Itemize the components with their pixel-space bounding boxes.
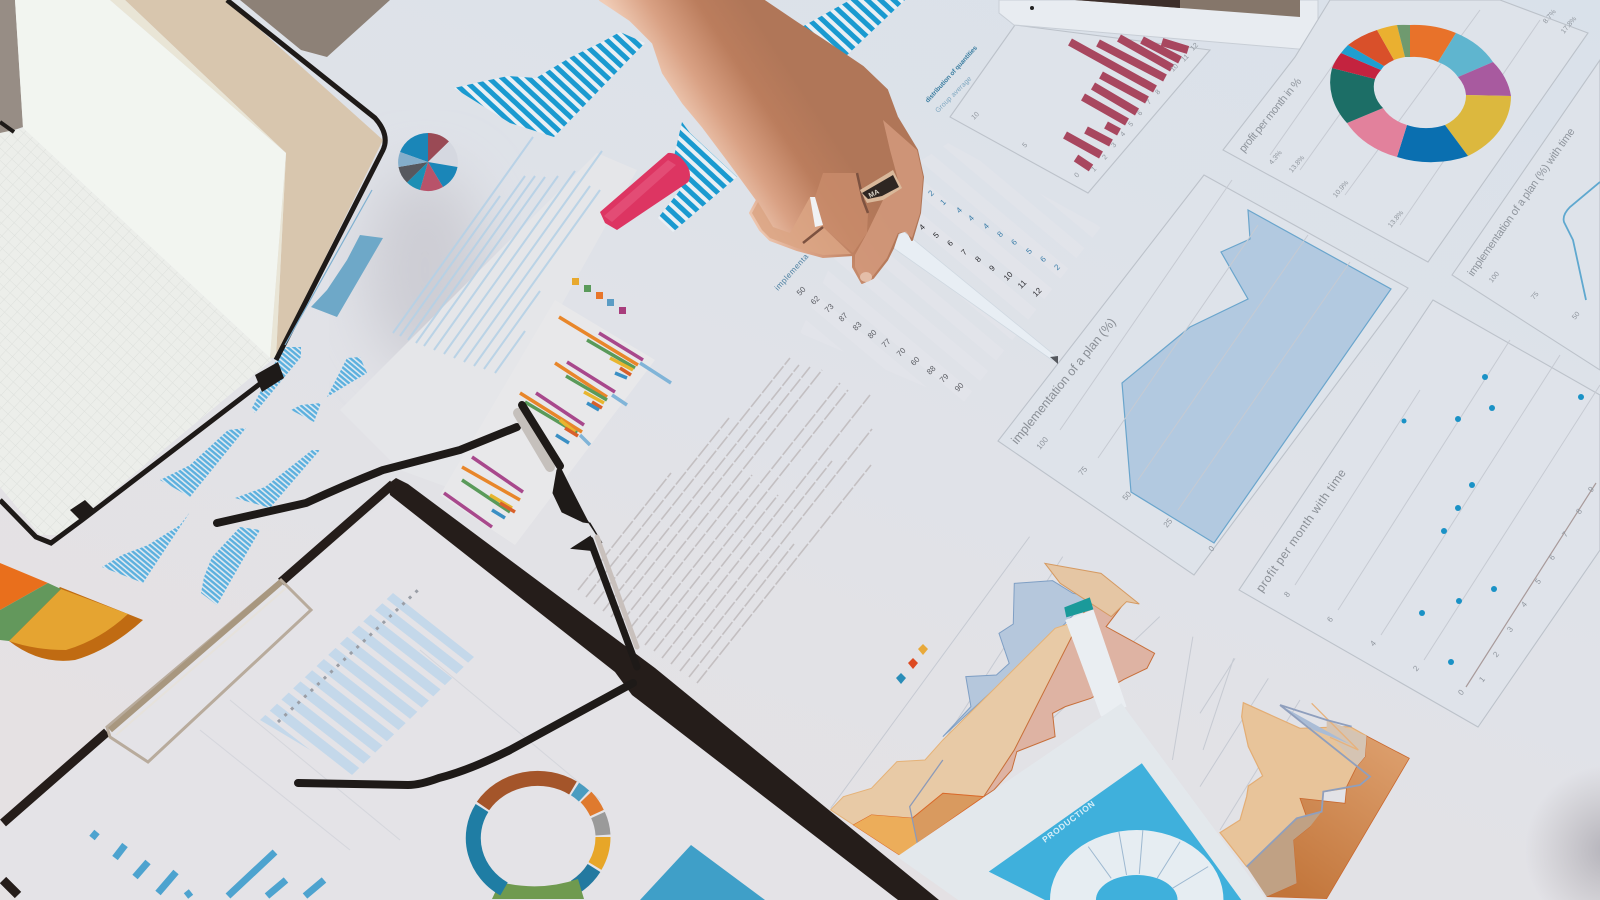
gridlines — [1060, 180, 1350, 510]
axis values: 4 — [1119, 131, 1127, 138]
axis values: 8 — [1574, 506, 1584, 516]
axis values: 3 — [1505, 624, 1515, 634]
cover and spine strap — [125, 0, 383, 358]
line series — [1564, 182, 1600, 300]
scatter points — [1402, 374, 1584, 665]
clipboard paper — [0, 495, 898, 900]
row: black values: 12 — [1031, 286, 1044, 299]
axis values: 8.7% — [1542, 9, 1558, 25]
row: blue values: 4 — [966, 213, 976, 223]
heading: implementation of a plan (%) with time — [1466, 126, 1578, 279]
donut chart: top right — [1330, 25, 1511, 162]
legend squares — [572, 278, 626, 314]
clipboard blue cover block — [640, 845, 765, 900]
row: grey values: 79 — [938, 372, 951, 385]
hand with pen — [600, 0, 1058, 364]
axis values: 1 — [1477, 674, 1487, 684]
notebook — [0, 0, 385, 543]
small blue bar charts on lower left paper — [102, 347, 367, 605]
axis values: 6 — [1136, 110, 1144, 117]
clipboard frame — [3, 478, 939, 900]
axis values: 0 — [1456, 687, 1466, 697]
heading: implementation of a plan (%) — [1008, 315, 1119, 447]
axis values: 4.3% — [1268, 150, 1284, 166]
row: black values: 10 — [1002, 270, 1015, 283]
vignette: bottom right corner — [1520, 760, 1600, 900]
axis values: 10.9% — [1332, 180, 1350, 199]
small blue area chart — [311, 235, 383, 317]
panel: implementation of a plan with time — [1452, 60, 1600, 370]
panel: data table — [773, 143, 1101, 403]
row: blue values: 8 — [995, 229, 1005, 239]
pen — [892, 230, 1058, 364]
row: black values — [917, 222, 1044, 299]
gridlines — [1295, 340, 1600, 660]
heading: profit per month with time — [1253, 466, 1349, 595]
axis values: 5 — [1533, 576, 1543, 586]
hand — [600, 0, 923, 283]
panel: production sheet — [897, 703, 1267, 900]
white marker pen — [1064, 597, 1127, 717]
production heading: PRODUCTION — [1040, 799, 1097, 845]
panel: sheet with blue text — [340, 137, 637, 490]
axis values: 0 — [1207, 544, 1217, 553]
axis values: 100 — [1035, 435, 1050, 451]
clipboard striped bar chart — [200, 590, 600, 850]
area series — [1122, 210, 1391, 543]
axis values: 75 — [1530, 291, 1541, 301]
clipboard metal clip — [107, 580, 311, 762]
row: grey values: 62 — [809, 294, 822, 307]
axis values: 9 — [1586, 484, 1596, 494]
striped bar chart: top blue — [454, 32, 645, 137]
row: blue values: 5 — [1024, 246, 1034, 256]
axis values: 10 — [1169, 63, 1180, 73]
panel: distribution bar chart — [924, 25, 1210, 193]
row: black values: 7 — [959, 247, 969, 257]
shadow under notebook — [365, 170, 485, 370]
legend diamonds — [896, 644, 928, 684]
panel: implementation of a plan area chart — [998, 175, 1408, 575]
axis values: 13.8% — [1387, 210, 1405, 229]
fingers shading — [855, 120, 923, 281]
row: grey values: 80 — [866, 328, 879, 341]
panel: profit per month in percent — [1223, 0, 1588, 262]
axis values — [1488, 271, 1582, 321]
x axis line — [1466, 483, 1596, 687]
row: grey values: 90 — [953, 381, 966, 394]
axis values — [970, 42, 1200, 179]
ring: MA — [868, 189, 881, 200]
axis values: 5 — [1021, 142, 1029, 149]
row: black values: 6 — [945, 238, 955, 248]
axis values: 2 — [1491, 649, 1501, 659]
axis values: 11 — [1180, 53, 1191, 63]
row: black values: 8 — [973, 254, 983, 264]
axis values: 3 — [1110, 142, 1118, 149]
row: blue values: 6 — [1038, 254, 1048, 264]
axis values: 0 — [1073, 172, 1081, 179]
row: black values: 4 — [917, 222, 927, 232]
wooden desk corner — [0, 0, 390, 135]
row: blue values: 2 — [1052, 262, 1062, 272]
panel: profit per month scatter chart — [1239, 300, 1600, 727]
axis values: 12 — [1189, 42, 1200, 52]
axis values: 5 — [1127, 121, 1135, 128]
row: black values: 5 — [931, 230, 941, 240]
crimson bars — [1065, 38, 1188, 168]
axis values: 50 — [1571, 311, 1582, 321]
grid page — [0, 128, 272, 535]
row: grey values: 50 — [795, 285, 808, 298]
gap between fingers — [810, 197, 823, 227]
axis values: 17.8% — [1560, 16, 1578, 35]
axis values: 13.8% — [1288, 155, 1306, 174]
axis values: 1 — [1090, 166, 1098, 173]
axis values: 4 — [1368, 638, 1378, 648]
heading: distribution of quantities: distribution of quantities — [924, 44, 979, 104]
axis values: 7 — [1145, 99, 1153, 106]
row: black values: 9 — [987, 263, 997, 273]
row: grey values: 60 — [909, 355, 922, 368]
row: blue values: 4 — [954, 205, 964, 215]
row: grey values: 88 — [925, 364, 938, 377]
axis values: 7 — [1560, 529, 1570, 539]
elastic band and edges — [227, 0, 385, 360]
row: black values: 11 — [1016, 278, 1029, 290]
row: grey values: 83 — [851, 320, 864, 333]
area chart: right warm — [1200, 658, 1409, 899]
axis values: 10 — [970, 111, 981, 121]
axis values: 100 — [1488, 271, 1501, 284]
axis values — [1035, 435, 1217, 553]
axis values: 25 — [1162, 516, 1175, 529]
glasses — [217, 405, 637, 785]
axis values: 6 — [1325, 614, 1335, 624]
multicolour half pie — [0, 563, 143, 661]
subheading: group average: Group average — [934, 75, 973, 114]
tablet — [999, 0, 1318, 50]
heading: profit per month in % — [1237, 76, 1304, 155]
row: grey values: 87 — [837, 311, 850, 324]
row: blue values: 1 — [938, 197, 948, 207]
axis values: 8 — [1154, 89, 1162, 96]
row: blue values: 2 — [926, 188, 936, 198]
row: grey values — [795, 285, 966, 394]
icon: small pie chart — [398, 133, 458, 191]
axis values — [1282, 484, 1596, 697]
axis values: 6 — [1547, 552, 1557, 562]
striped bar chart: behind marker — [658, 122, 737, 232]
text block: blurred report lines — [578, 358, 872, 683]
axis values: 75 — [1077, 464, 1090, 477]
axis values: 2 — [1411, 663, 1421, 673]
row: grey values: 70 — [895, 346, 908, 359]
axis values — [1268, 9, 1578, 229]
donut chart: clipboard — [473, 778, 603, 899]
row: blue values: 4 — [981, 221, 991, 231]
row: blue values — [926, 188, 1062, 272]
axis values: 4 — [1519, 599, 1529, 609]
row: blue values: 6 — [1009, 237, 1019, 247]
axis values: 2 — [1101, 154, 1109, 161]
red marker pen — [600, 153, 690, 230]
ring — [860, 170, 902, 203]
panel: grouped colour bar chart — [440, 278, 671, 545]
area chart: left warm — [831, 537, 1234, 855]
axis values: 50 — [1121, 489, 1134, 502]
table heading: implementa — [773, 252, 811, 292]
axis values: 8 — [1282, 589, 1292, 599]
fingernail — [860, 272, 872, 282]
row: grey values: 73 — [823, 302, 836, 315]
striped bar chart: top right blue — [800, 0, 905, 57]
upright page — [15, 0, 286, 358]
clipboard small blue bars — [92, 832, 324, 896]
gridlines — [1270, 10, 1540, 225]
row: grey values: 77 — [880, 337, 893, 350]
